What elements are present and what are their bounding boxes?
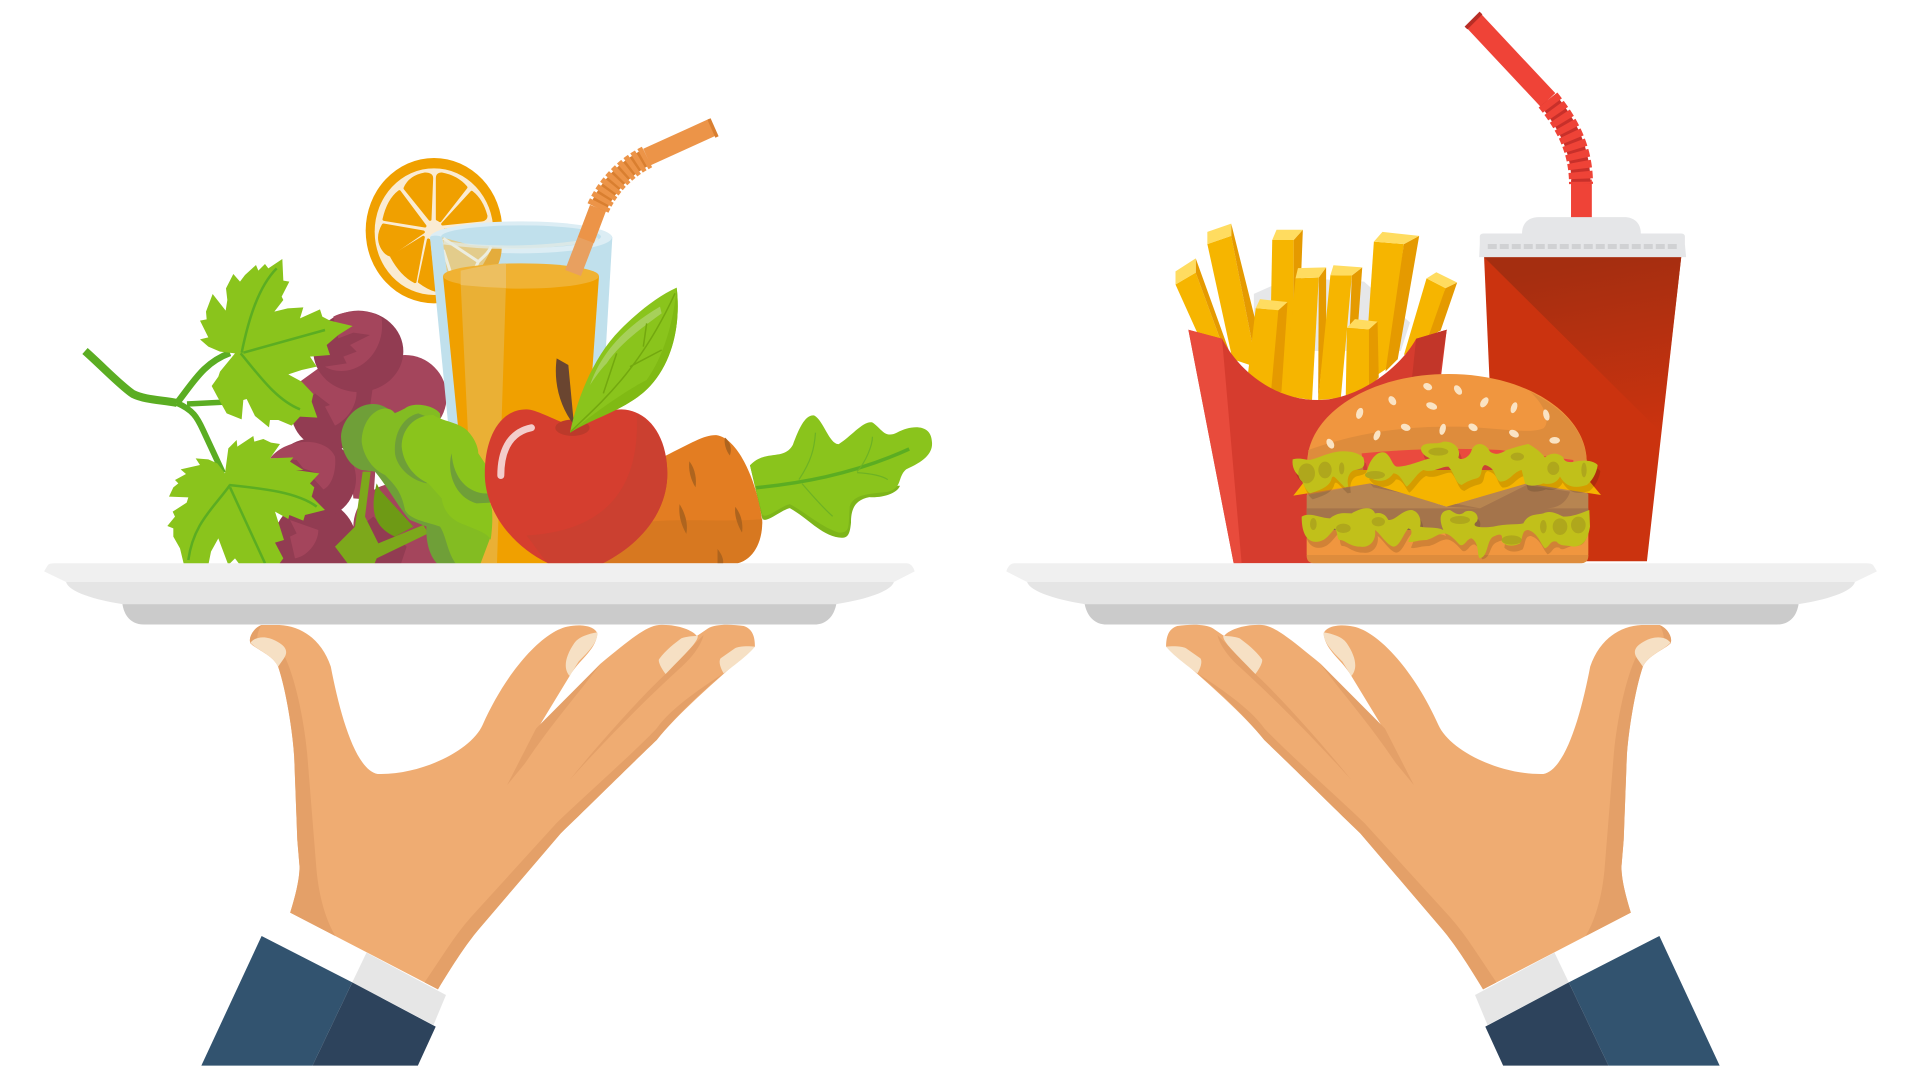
icon: fries box front [1188,330,1447,563]
right hand holding tray [1166,625,1720,1066]
icon: grape vine stem [85,351,230,473]
icon: apple [485,409,667,563]
icon: orange slice [366,158,502,303]
icon: fries box back panel [1254,278,1447,392]
icon: grapes [270,311,447,587]
icon: glass of orange juice [430,221,612,563]
icon: juice straw [573,119,717,273]
icon: soda cup [1479,180,1686,561]
icon: carrot with greens [603,415,932,564]
icon: soda straw [1466,13,1581,184]
icon: lettuce with stalk [335,404,492,567]
icon: apple stem and leaf [556,288,678,433]
icon: burger [1292,374,1601,563]
icon: grape leaves [167,259,353,565]
left hand holding tray [201,625,755,1066]
tray: fast food [1006,563,1877,624]
icon: french fries [1176,224,1457,400]
tray: healthy food [44,563,915,624]
